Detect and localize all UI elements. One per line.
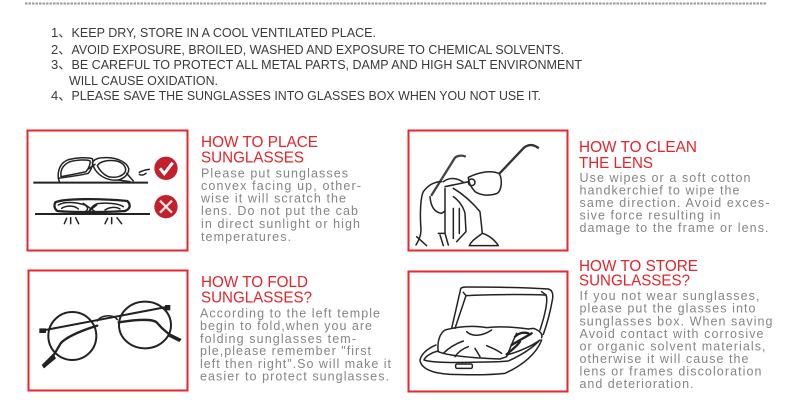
- text block: how to clean the lens: [579, 139, 770, 235]
- icon: cross mark badge: [154, 195, 178, 218]
- body: how to clean: same direction. Avoid exces-: [580, 196, 770, 210]
- icon: glasses convex side up on surface: [33, 158, 149, 183]
- body: how to fold: folding sunglasses tem-: [200, 332, 356, 346]
- heading: how to clean: HOW TO CLEAN: [579, 139, 697, 156]
- body: how to fold: easier to protect sunglasses.: [200, 370, 389, 384]
- body: how to clean: [580, 171, 770, 235]
- heading: how to place: HOW TO PLACE: [201, 134, 318, 151]
- body: how to clean: sive force resulting in: [580, 208, 721, 222]
- body: how to place: wise it will scratch the: [200, 192, 346, 206]
- heading: how to place: SUNGLASSES: [201, 150, 304, 166]
- panel: how to clean illustration: [408, 130, 568, 250]
- body: how to clean: handkerchief to wipe the: [580, 184, 740, 198]
- care instructions list: 4、: [51, 88, 71, 103]
- body: how to clean: damage to the frame or lens.: [580, 221, 768, 235]
- heading: how to store: SUNGLASSES?: [579, 272, 690, 290]
- care instructions list: BE CAREFUL TO PROTECT ALL METAL PARTS, DAMP AND HIGH SALT ENVIRONMENT: [72, 57, 582, 72]
- care instructions list: 2、: [51, 42, 71, 57]
- care instructions list: [51, 25, 582, 103]
- heading: how to fold: [201, 274, 312, 306]
- text block: how to place sunglasses: [200, 134, 361, 244]
- body: how to store: otherwise it will cause the: [580, 352, 749, 366]
- body: how to place: in direct sunlight or high: [201, 217, 360, 231]
- panel: how to fold illustration: [28, 270, 188, 390]
- body: how to place: [200, 166, 361, 244]
- body: how to fold: [200, 306, 392, 384]
- care instructions list: 3、: [51, 57, 71, 72]
- body: how to place: temperatures.: [201, 230, 291, 244]
- body: how to clean: Use wipes or a soft cotton: [580, 171, 751, 185]
- body: how to fold: left then right".So will make it: [200, 357, 392, 371]
- icon: glasses lens side down on surface: [35, 199, 150, 224]
- heading: how to clean: [579, 139, 697, 172]
- body: how to store: please put the glasses into: [580, 302, 756, 316]
- body: how to store: lens or frames discoloration: [580, 364, 762, 378]
- body: how to place: lens. Do not put the cab: [201, 204, 358, 218]
- body: how to fold: begin to fold,when you are: [200, 319, 372, 333]
- body: how to store: Avoid contact with corrosive: [580, 327, 764, 341]
- icon: hands wiping glasses: [416, 145, 538, 246]
- body: how to place: Please put sunglasses: [201, 166, 348, 180]
- heading: how to store: HOW TO STORE: [579, 258, 698, 275]
- icon: glasses case with cloth: [420, 287, 553, 375]
- body: how to fold: According to the left temple: [200, 306, 380, 320]
- icon: round glasses: [39, 302, 182, 368]
- heading: how to fold: SUNGLASSES?: [201, 290, 312, 306]
- care instructions list: AVOID EXPOSURE, BROILED, WASHED AND EXPOSURE TO CHEMICAL SOLVENTS.: [72, 42, 564, 57]
- heading: how to place: [201, 134, 318, 166]
- text block: how to store sunglasses: [579, 258, 773, 391]
- care instructions list: WILL CAUSE OXIDATION.: [69, 73, 218, 88]
- panel: how to place illustration: [28, 130, 188, 250]
- body: how to store: If you not wear sunglasses,: [580, 289, 760, 303]
- care instructions list: 1、: [51, 25, 71, 40]
- care instructions list: PLEASE SAVE THE SUNGLASSES INTO GLASSES BOX WHEN YOU NOT USE IT.: [72, 88, 541, 103]
- body: how to fold: ple,please remember "first: [200, 344, 372, 358]
- body: how to store: [580, 289, 773, 391]
- panel: how to store illustration: [408, 272, 568, 392]
- heading: how to store: [579, 258, 698, 290]
- heading: how to fold: HOW TO FOLD: [201, 274, 308, 291]
- care instructions list: KEEP DRY, STORE IN A COOL VENTILATED PLACE.: [72, 25, 376, 40]
- icon: check mark badge: [154, 157, 178, 180]
- body: how to store: sunglasses box. When saving: [580, 314, 773, 328]
- body: how to store: or organic solvent materials,: [580, 340, 766, 354]
- body: how to place: convex facing up, other-: [201, 179, 361, 193]
- heading: how to clean: THE LENS: [579, 155, 653, 172]
- text block: how to fold sunglasses: [200, 274, 392, 384]
- body: how to store: and deterioration.: [580, 377, 694, 391]
